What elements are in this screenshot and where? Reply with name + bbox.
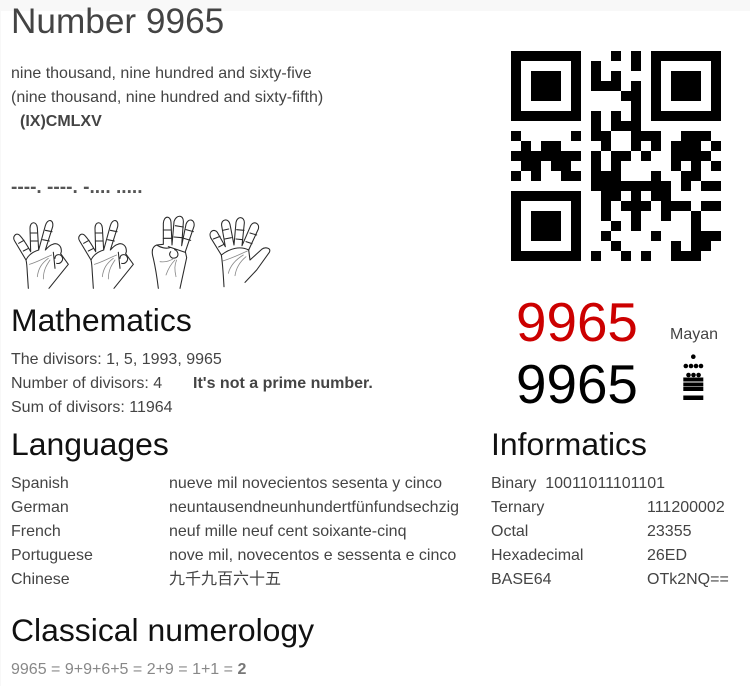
QR code bbox=[511, 51, 721, 261]
Spanish row: nueve mil novecientos sesenta y cinco bbox=[169, 475, 442, 492]
red number: 9965 bbox=[516, 291, 638, 353]
Chinese row: Chinese bbox=[11, 571, 70, 588]
Portuguese row: Portuguese bbox=[11, 547, 93, 564]
base64 row bbox=[491, 571, 729, 588]
heading: Languages: Languages bbox=[11, 426, 169, 462]
hexadecimal row: Hexadecimal bbox=[491, 547, 583, 564]
icon: hand sign 6 bbox=[152, 216, 194, 288]
icon: Mayan numeral bbox=[683, 354, 704, 400]
octal row bbox=[491, 523, 692, 540]
hexadecimal row: 26ED bbox=[647, 547, 687, 564]
ternary row bbox=[491, 499, 725, 516]
icon: hand sign 5 bbox=[210, 218, 270, 287]
German row bbox=[11, 499, 459, 516]
German row: German bbox=[11, 499, 69, 516]
number of divisors: Number of divisors: 4 bbox=[11, 375, 162, 392]
Portuguese row bbox=[11, 547, 456, 564]
French row: French bbox=[11, 523, 61, 540]
mathematics facts bbox=[11, 351, 373, 416]
icon: hand sign 9 bbox=[79, 221, 133, 288]
Chinese row bbox=[11, 570, 281, 588]
octal row: Octal bbox=[491, 523, 528, 540]
binary row: Binary 10011011101101 bbox=[491, 475, 665, 492]
base64 row: BASE64 bbox=[491, 571, 551, 588]
cardinal name: nine thousand, nine hundred and sixty-five bbox=[11, 65, 312, 82]
French row: neuf mille neuf cent soixante-cinq bbox=[169, 523, 406, 540]
heading: Informatics: Informatics bbox=[491, 426, 647, 462]
black number: 9965 bbox=[516, 353, 638, 415]
French row bbox=[11, 523, 406, 540]
heading: Mathematics: Mathematics bbox=[11, 302, 192, 338]
roman numeral: (IX)CMLXV bbox=[20, 113, 102, 130]
Spanish row bbox=[11, 475, 442, 492]
top grey strip bbox=[0, 0, 750, 11]
numerology calculation: 9965 = 9+9+6+5 = 2+9 = 1+1 = 2 bbox=[11, 661, 246, 678]
German row: neuntausendneunhundertfünfundsechzig bbox=[169, 499, 459, 516]
Spanish row: Spanish bbox=[11, 475, 69, 492]
Portuguese row: nove mil, novecentos e sessenta e cinco bbox=[169, 547, 456, 564]
heading: Classical numerology: Classical numerology bbox=[11, 612, 314, 648]
divisors: The divisors: 1, 5, 1993, 9965 bbox=[11, 351, 222, 368]
octal row: 23355 bbox=[647, 523, 692, 540]
informatics table bbox=[491, 475, 729, 588]
left grey edge bbox=[0, 0, 1, 686]
sum of divisors: Sum of divisors: 11964 bbox=[11, 399, 173, 416]
prime note: It's not a prime number. bbox=[193, 375, 373, 392]
Mayan label: Mayan bbox=[670, 326, 718, 343]
ternary row: 111200002 bbox=[647, 499, 725, 516]
number in words and roman numeral bbox=[11, 65, 323, 130]
ordinal name: (nine thousand, nine hundred and sixty-fifth) bbox=[11, 89, 323, 106]
languages table bbox=[11, 475, 459, 588]
morse code: ----. ----. -.... ..... bbox=[11, 177, 142, 198]
base64 row: OTk2NQ== bbox=[647, 571, 729, 588]
icon: hand sign 9 bbox=[14, 221, 68, 288]
Chinese row: 九千九百六十五 bbox=[169, 571, 281, 588]
hexadecimal row bbox=[491, 547, 687, 564]
sign language hands bbox=[13, 216, 270, 289]
ternary row: Ternary bbox=[491, 499, 544, 516]
title: Number 9965 bbox=[11, 2, 224, 41]
